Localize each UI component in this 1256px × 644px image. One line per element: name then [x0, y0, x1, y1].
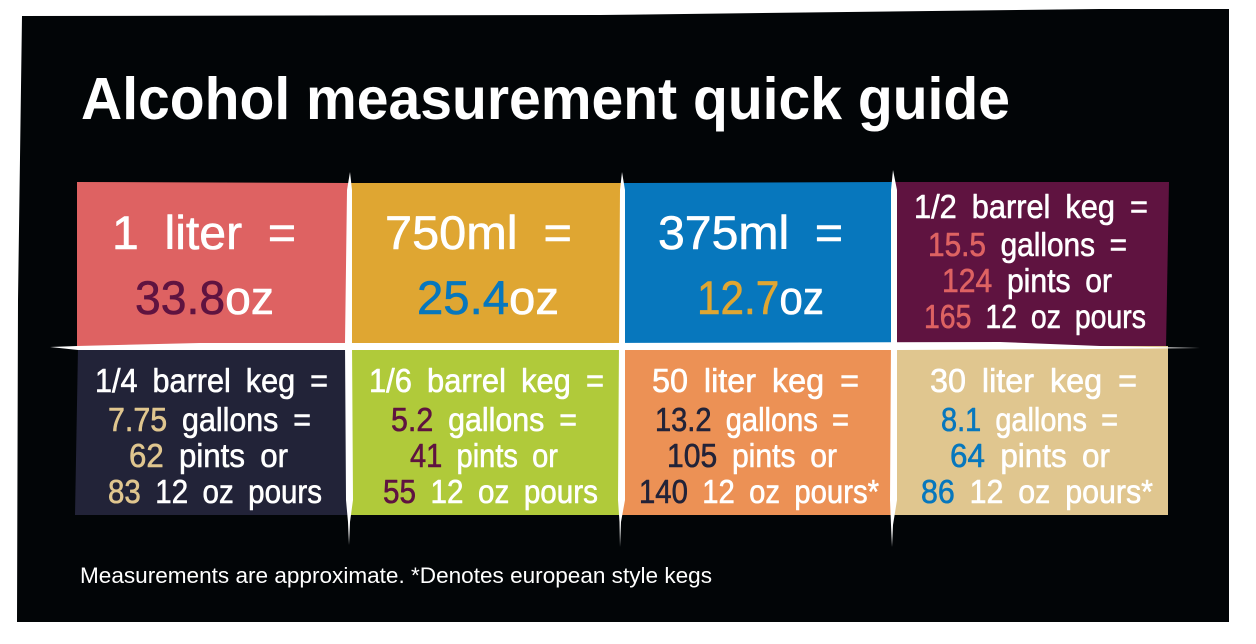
grid dividers: chalk lines: [50, 170, 1200, 547]
text: 750ml equals 25.4oz: [385, 206, 572, 324]
text: 1/2 barrel keg figures: 124 pints or: [942, 262, 1112, 299]
text: 50 liter keg figures: 50 liter keg =: [652, 362, 859, 399]
text: 1/6 barrel keg figures: 5.2 gallons =: [391, 401, 577, 438]
text: 1 liter equals 33.8oz: [112, 206, 296, 324]
panel: 30 liter keg: [894, 346, 1168, 515]
text: 1/4 barrel keg figures: [95, 362, 328, 510]
text: 30 liter keg figures: 30 liter keg =: [930, 362, 1137, 399]
text: 30 liter keg figures: 86 12 oz pours*: [921, 473, 1153, 510]
text: 50 liter keg figures: 140 12 oz pours*: [639, 473, 879, 510]
text: 1/6 barrel keg figures: [369, 362, 604, 510]
text: 30 liter keg figures: 8.1 gallons =: [941, 401, 1118, 438]
text: 750ml equals 25.4oz: 750ml =: [385, 206, 572, 259]
text: 1/2 barrel keg figures: 1/2 barrel keg =: [914, 188, 1148, 225]
text: 1/4 barrel keg figures: 1/4 barrel keg =: [95, 362, 328, 399]
text: 1 liter equals 33.8oz: 33.8oz: [135, 271, 274, 324]
panel: 1/4 barrel keg: [75, 346, 350, 515]
text: 50 liter keg figures: 105 pints or: [667, 437, 837, 474]
text: 1/4 barrel keg figures: 62 pints or: [129, 437, 288, 474]
text: 1/6 barrel keg figures: 41 pints or: [410, 437, 558, 474]
footnote: Measurements are approximate. *Denotes european style kegs: [80, 563, 712, 588]
text: 1/2 barrel keg figures: [914, 188, 1148, 335]
panel: 1 liter: [77, 182, 350, 348]
text: 1/2 barrel keg figures: 15.5 gallons =: [928, 226, 1127, 263]
text: 1/6 barrel keg figures: 55 12 oz pours: [383, 473, 598, 510]
panel: 50 liter keg: [622, 346, 894, 515]
text: 50 liter keg figures: [639, 362, 879, 510]
text: 1/4 barrel keg figures: 83 12 oz pours: [108, 473, 322, 510]
text: 30 liter keg figures: 64 pints or: [950, 437, 1110, 474]
text: 375ml equals 12.7oz: 375ml =: [658, 206, 843, 259]
text: 1/2 barrel keg figures: 165 12 oz pours: [924, 298, 1146, 335]
text: 1 liter equals 33.8oz: 1 liter =: [112, 206, 296, 259]
text: 1/4 barrel keg figures: 7.75 gallons =: [108, 401, 311, 438]
text: 375ml equals 12.7oz: [658, 206, 843, 324]
text: 1/6 barrel keg figures: 1/6 barrel keg =: [369, 362, 604, 399]
text: 375ml equals 12.7oz: 12.7oz: [697, 271, 824, 324]
panel: 1/2 barrel keg: [894, 182, 1169, 348]
panel: 1/6 barrel keg: [350, 346, 622, 515]
text: 750ml equals 25.4oz: 25.4oz: [417, 271, 559, 324]
panel: 375ml: [622, 182, 894, 346]
text: 30 liter keg figures: [921, 362, 1153, 510]
title: Alcohol measurement quick guide: [81, 66, 1010, 132]
text: 50 liter keg figures: 13.2 gallons =: [655, 401, 849, 438]
panel: 750ml: [350, 183, 622, 346]
